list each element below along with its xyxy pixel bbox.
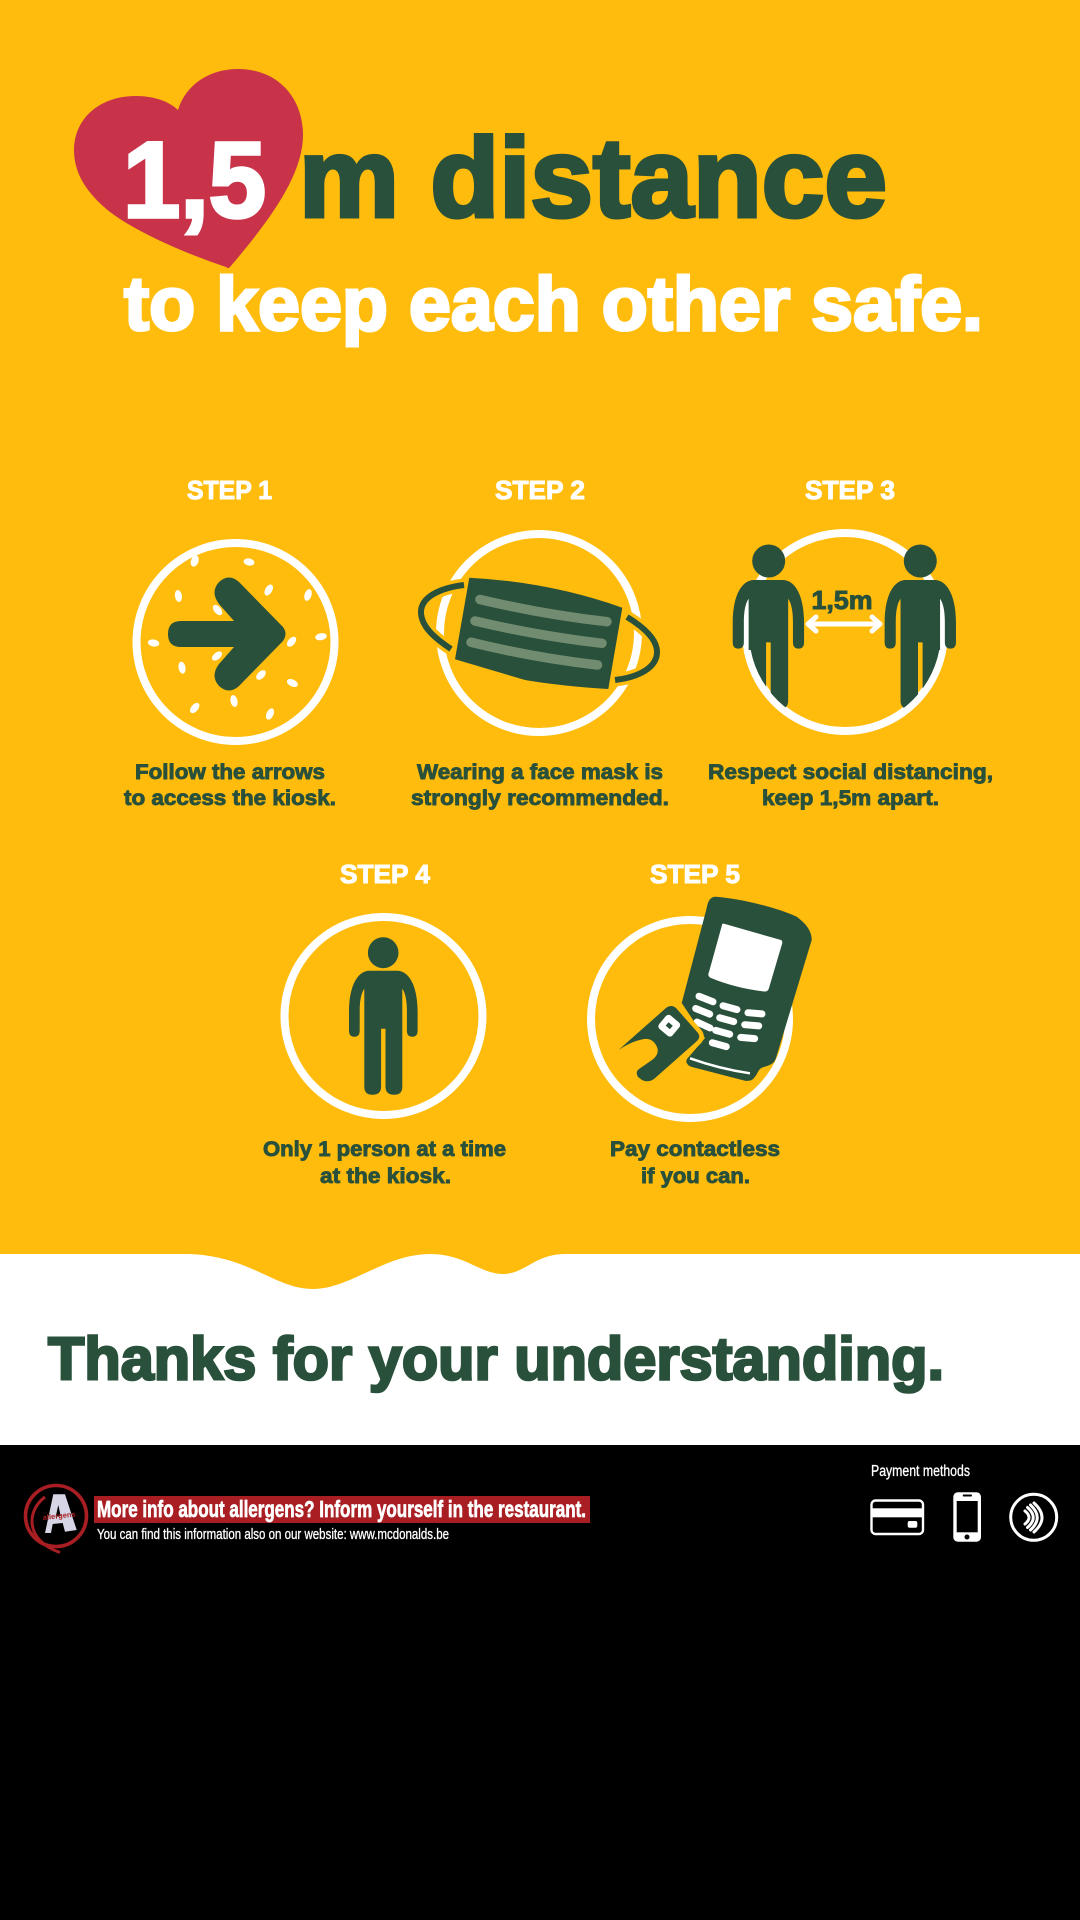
yellow drip shape	[189, 1254, 565, 1289]
text: step 4 caption: Only 1 person at a time	[263, 1137, 506, 1161]
icon: face mask	[421, 578, 657, 689]
text: step 3 caption: Respect social distancing,	[708, 760, 993, 784]
text: step 3 caption: keep 1,5m apart.	[762, 786, 939, 810]
icon: person	[349, 937, 418, 1095]
heading: step 4: STEP 4	[340, 861, 431, 889]
text: step 3 caption	[708, 760, 993, 810]
heading: step 2: STEP 2	[495, 477, 585, 505]
panel: step 1	[124, 477, 336, 810]
text: step 5 caption	[610, 1137, 780, 1188]
icon: right person	[885, 544, 956, 709]
icon: allergens logo	[26, 1486, 86, 1552]
text: step 1 caption	[124, 760, 336, 810]
icon: sesame seeds	[147, 554, 327, 721]
text: step 2 caption	[411, 760, 669, 810]
text: step 2 caption: strongly recommended.	[411, 786, 669, 810]
icon: left person	[733, 544, 804, 709]
panel: step 5	[591, 861, 812, 1188]
text: step 1 caption: to access the kiosk.	[124, 786, 336, 810]
text: step 5 caption: Pay contactless	[610, 1137, 780, 1161]
heading: payment methods: Payment methods	[871, 1463, 970, 1480]
icon: arrow	[168, 578, 286, 690]
icon: bank card	[618, 1006, 699, 1081]
text: website note: You can find this information also on our website: www.mcdonalds.be	[97, 1527, 449, 1543]
subtitle: to keep each other safe.	[124, 262, 983, 347]
panel: yellow background	[0, 0, 1080, 1255]
arrow: double arrow	[808, 617, 880, 631]
text: step 4 caption: at the kiosk.	[320, 1164, 451, 1188]
icon: allergens logo: allergens	[42, 1510, 76, 1522]
heading: step 3: STEP 3	[805, 477, 895, 505]
icon: contactless	[1011, 1494, 1057, 1540]
heading: step 1: STEP 1	[187, 477, 272, 505]
callout: allergen banner: More info about allergens? Inform yourself in the restaurant.	[97, 1496, 586, 1522]
label: 1,5m: 1,5m	[812, 585, 872, 615]
icon: smartphone	[953, 1492, 981, 1542]
panel: step 3	[708, 477, 993, 810]
circle	[591, 920, 789, 1118]
panel: step 4	[263, 861, 506, 1188]
title: m distance: m distance	[299, 116, 887, 240]
heading: thanks: Thanks for your understanding.	[48, 1326, 944, 1392]
heading: step 5: STEP 5	[650, 861, 740, 889]
text: step 4 caption	[263, 1137, 506, 1188]
circle	[284, 917, 482, 1115]
icon: red heart	[74, 69, 303, 268]
text: step 5 caption: if you can.	[641, 1164, 750, 1188]
circle	[746, 533, 944, 731]
panel: white thanks band	[0, 1254, 1080, 1445]
icon: payment terminal	[682, 897, 812, 1081]
panel: step 2	[411, 477, 669, 810]
circle	[440, 534, 638, 732]
title: 1,5: 1,5	[123, 119, 266, 240]
panel: black footer	[0, 1445, 1080, 1920]
circle	[136, 543, 334, 741]
text: step 1 caption: Follow the arrows	[135, 760, 325, 784]
icon: credit card	[871, 1500, 923, 1534]
text: step 2 caption: Wearing a face mask is	[417, 760, 663, 784]
